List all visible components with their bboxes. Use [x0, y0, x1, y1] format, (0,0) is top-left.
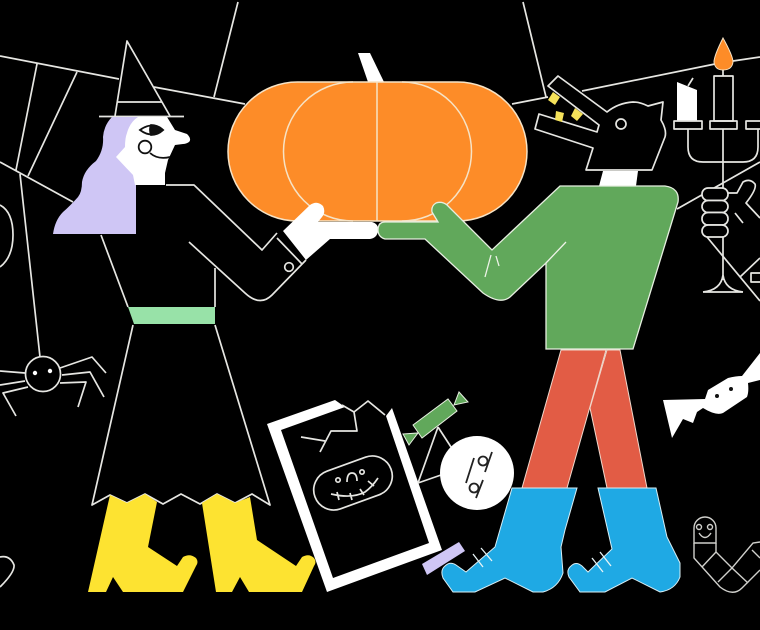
bat — [663, 353, 760, 438]
witch right boot — [202, 494, 316, 592]
boot laces — [473, 548, 611, 572]
witch eye and cheek — [139, 125, 170, 158]
werewolf — [378, 76, 680, 592]
candlestick frame — [674, 66, 760, 292]
gripping hand — [702, 180, 760, 301]
lavender bar — [422, 542, 465, 575]
wolf head — [535, 76, 666, 170]
witch hand — [283, 203, 378, 260]
witch sleeve — [101, 185, 306, 307]
red legs — [522, 350, 647, 488]
worm — [694, 517, 760, 592]
spider — [0, 356, 106, 416]
tombstone card — [267, 400, 442, 592]
sweater folds — [485, 242, 566, 277]
witch hair — [53, 117, 138, 234]
wolf eye — [616, 119, 626, 129]
white candle — [677, 82, 697, 121]
witch — [53, 41, 378, 592]
crack lines — [301, 401, 385, 452]
capsule face — [308, 450, 398, 516]
witch face — [116, 117, 190, 185]
witch belt — [128, 307, 215, 324]
witch hat — [99, 41, 184, 116]
blue right boot — [568, 488, 680, 592]
wolf teeth — [548, 92, 583, 122]
heart outline — [0, 557, 14, 587]
witch left boot — [88, 494, 198, 592]
white face circle — [440, 436, 514, 510]
cuff button — [285, 263, 293, 271]
green sweater — [378, 186, 678, 349]
spider web — [0, 2, 760, 357]
candlestick — [674, 38, 760, 301]
blue left boot — [442, 488, 577, 592]
pumpkin — [228, 53, 527, 221]
witch skirt — [92, 325, 270, 505]
flame — [714, 38, 733, 70]
card frame — [267, 400, 442, 592]
neck — [599, 171, 638, 186]
candy — [403, 392, 468, 483]
